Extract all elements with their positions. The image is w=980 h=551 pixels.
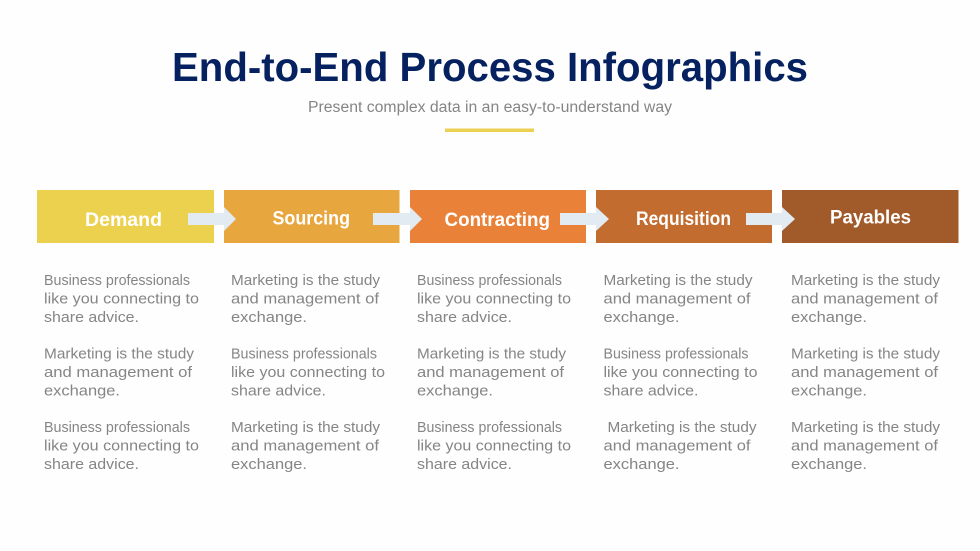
step: Requisition: Requisition — [636, 209, 731, 230]
column text: Demand: Business professionals — [44, 419, 190, 436]
column text: Sourcing: Marketing is the study — [231, 272, 381, 289]
column text: Requisition — [604, 272, 758, 473]
column text: Sourcing — [231, 272, 385, 473]
column text: Payables: Marketing is the study — [791, 272, 941, 289]
column text: Payables: and management of — [791, 438, 939, 454]
column text: Sourcing: Marketing is the study — [231, 419, 381, 436]
column text: Contracting — [417, 272, 571, 473]
column text: Requisition: Business professionals — [604, 346, 748, 362]
column text: Requisition: exchange. — [604, 309, 680, 326]
step: Contracting — [410, 190, 586, 243]
column text: Contracting: like you connecting to — [417, 438, 571, 454]
arrow: Demand to Sourcing — [188, 207, 236, 231]
step: Demand: Demand — [85, 210, 162, 231]
arrow: Sourcing to Contracting — [373, 207, 422, 231]
column text: Contracting: like you connecting to — [417, 290, 571, 308]
column text: Demand — [44, 272, 199, 473]
column text: Contracting: share advice. — [417, 456, 512, 473]
column text: Requisition: Marketing is the study — [608, 419, 757, 436]
column text: Payables: and management of — [791, 364, 939, 381]
column text: Contracting: Marketing is the study — [417, 346, 567, 362]
subtitle: Present complex data in an easy-to-understand way — [308, 99, 672, 116]
column text: Sourcing: and management of — [231, 438, 380, 454]
column text: Demand: share advice. — [44, 456, 139, 473]
column text: Requisition: Marketing is the study — [604, 272, 753, 289]
column text: Demand: Marketing is the study — [44, 346, 195, 362]
column text: Demand: share advice. — [44, 309, 139, 326]
step: Demand — [37, 190, 214, 243]
column text: Sourcing: like you connecting to — [231, 364, 385, 381]
column text: Requisition: share advice. — [604, 382, 698, 400]
column text: Payables: Marketing is the study — [791, 346, 941, 362]
column text: Sourcing: Business professionals — [231, 346, 377, 362]
column text: Payables: exchange. — [791, 382, 867, 400]
column text: Sourcing: share advice. — [231, 382, 326, 400]
title underline accent — [445, 128, 534, 132]
column text: Contracting: Business professionals — [417, 419, 562, 436]
step: Sourcing: Sourcing — [272, 208, 350, 230]
column text: Contracting: exchange. — [417, 382, 493, 400]
column text: Contracting: and management of — [417, 364, 565, 381]
column text: Payables: Marketing is the study — [791, 419, 941, 436]
column text: Demand: like you connecting to — [44, 290, 199, 308]
step: Payables: Payables — [830, 208, 911, 228]
process flow header row — [37, 190, 958, 243]
column text: Contracting: Business professionals — [417, 272, 562, 289]
arrow: Contracting to Requisition — [560, 207, 609, 231]
column text: Demand: exchange. — [44, 382, 120, 400]
column text: Sourcing: exchange. — [231, 456, 307, 473]
column text: Payables: and management of — [791, 290, 939, 308]
column text: Requisition: and management of — [604, 438, 751, 454]
arrow: Requisition to Payables — [746, 207, 795, 231]
column text: Sourcing: and management of — [231, 290, 380, 308]
step: Sourcing — [224, 190, 400, 243]
step: Payables — [782, 190, 958, 243]
column text: Requisition: exchange. — [604, 456, 680, 473]
step: Contracting: Contracting — [444, 210, 550, 231]
title: End-to-End Process Infographics — [172, 44, 808, 90]
column text: Payables: exchange. — [791, 309, 867, 326]
column text: Sourcing: exchange. — [231, 309, 307, 326]
column text: Demand: and management of — [44, 364, 193, 381]
column text: Demand: like you connecting to — [44, 438, 199, 454]
column text: Payables — [791, 272, 941, 473]
column text: Demand: Business professionals — [44, 272, 190, 289]
column text: Requisition: and management of — [604, 290, 751, 308]
step: Requisition — [596, 190, 772, 243]
column text: Payables: exchange. — [791, 456, 867, 473]
column text: Requisition: like you connecting to — [604, 364, 758, 381]
column text: Contracting: share advice. — [417, 309, 512, 326]
